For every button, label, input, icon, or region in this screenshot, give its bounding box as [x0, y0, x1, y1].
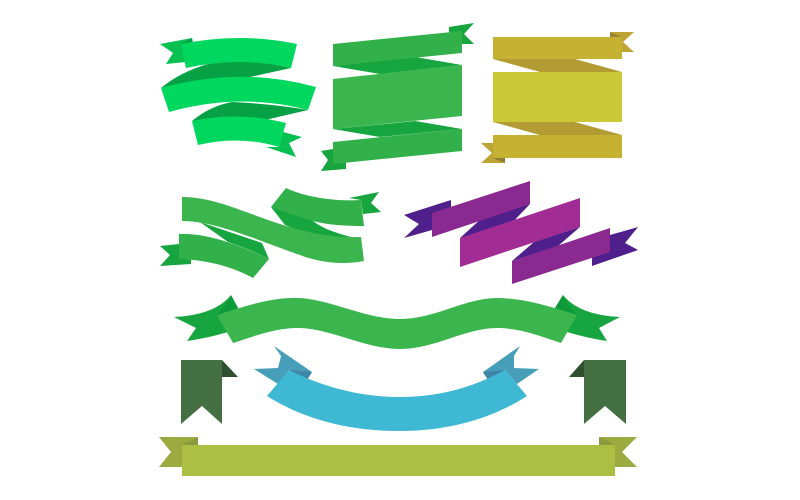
ribbon: gold folded — [481, 32, 634, 163]
bookmark: right dark green — [569, 360, 626, 424]
ribbon: green wavy folded — [160, 188, 381, 278]
ribbon: purple zigzag — [404, 181, 638, 284]
ribbon: long green wave — [174, 295, 620, 349]
ribbon: blue arch — [254, 346, 539, 431]
bookmark: left dark green — [181, 360, 238, 424]
ribbon: olive straight banner — [159, 437, 637, 476]
ribbon: green folded slanted — [321, 23, 474, 171]
ribbon: bright green curved — [160, 38, 316, 157]
